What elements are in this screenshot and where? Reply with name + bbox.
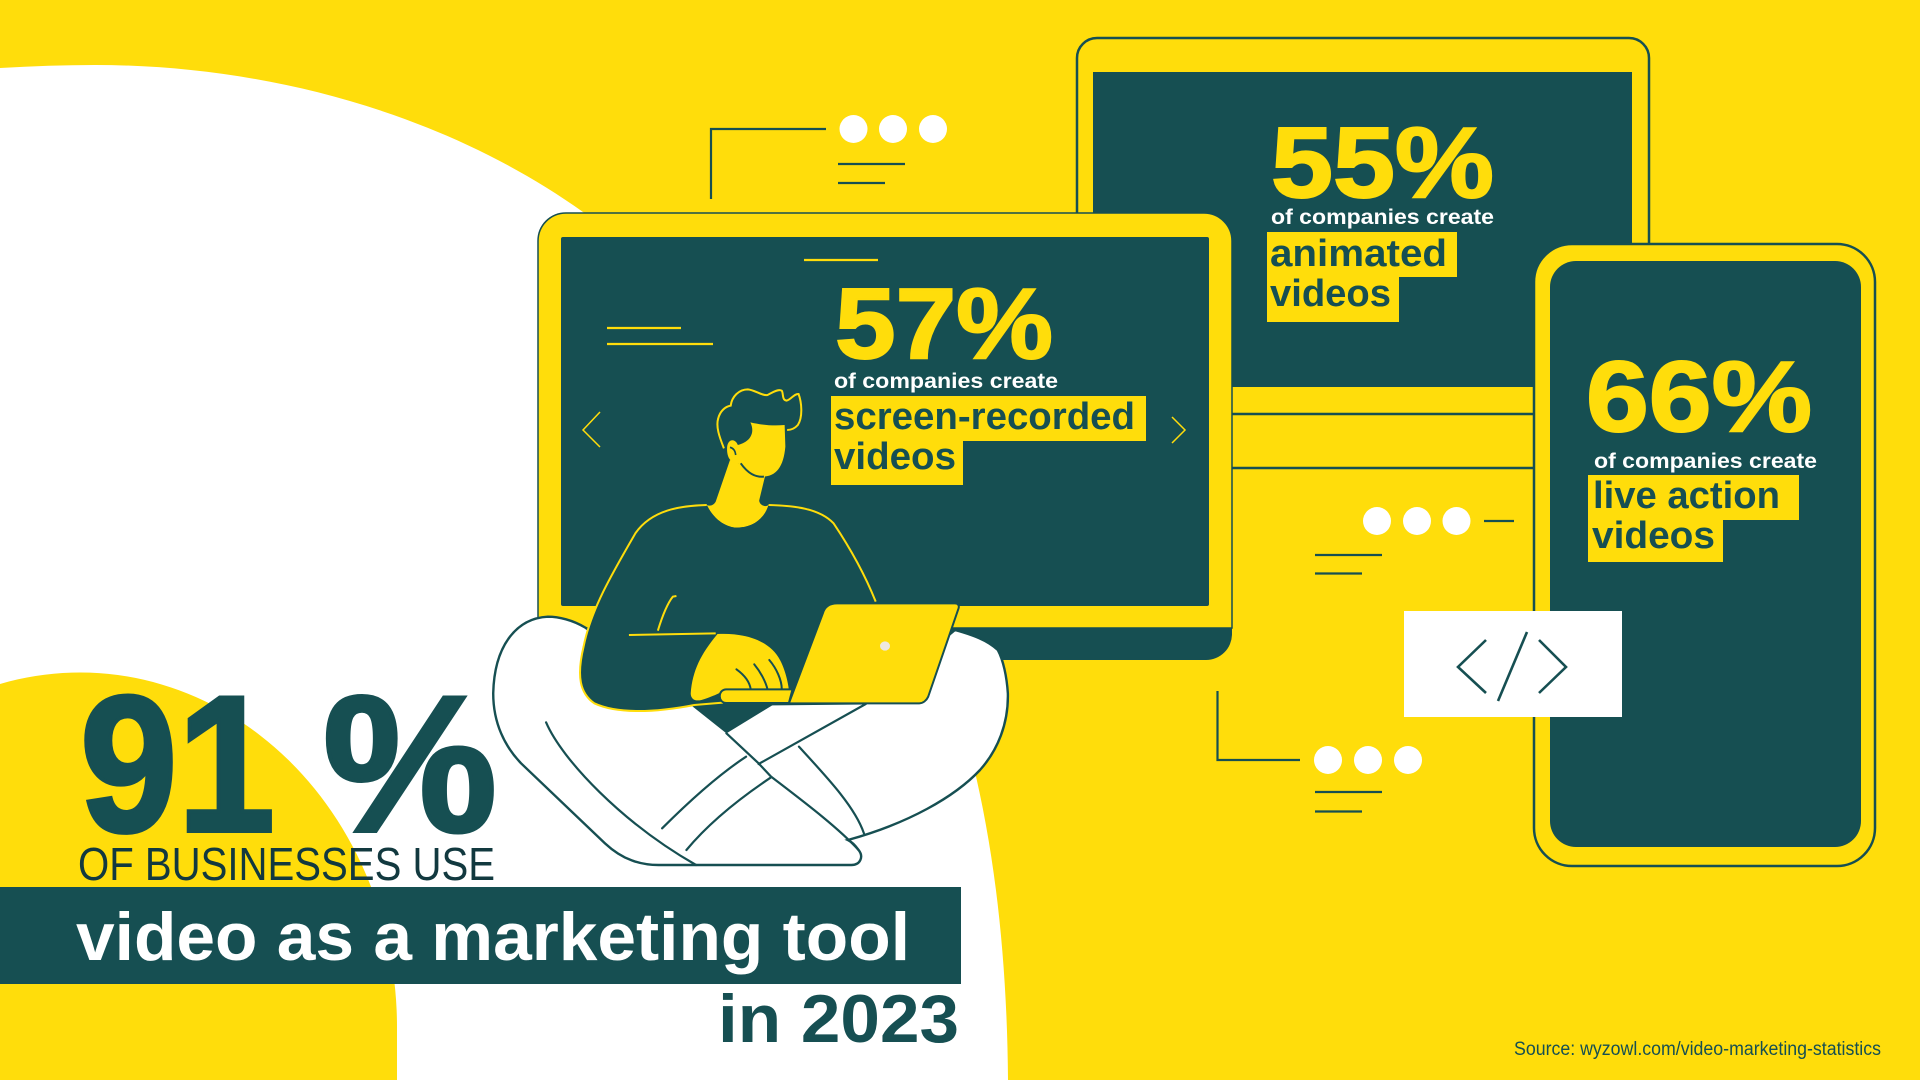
- highlight: screen-recorded videos: [831, 396, 1146, 485]
- icon: dots and lines bottom: [1218, 691, 1422, 812]
- icon: dots and lines top: [711, 115, 947, 199]
- heading: of businesses use: OF BUSINESSES USE: [78, 838, 495, 890]
- stat: 55%: 55%: [1271, 107, 1494, 219]
- icon: dots and lines middle: [1315, 507, 1514, 574]
- hand: [691, 634, 789, 700]
- banner: video as a marketing tool: video as a marketing tool: [76, 899, 910, 975]
- highlight: screen-recorded videos: videos: [834, 436, 956, 478]
- highlight: animated videos: animated: [1270, 233, 1447, 275]
- legs: [493, 617, 1008, 865]
- shirt: [580, 505, 876, 711]
- white background curve: [0, 65, 1008, 1080]
- icon: left arrow: [583, 412, 600, 447]
- highlight: screen-recorded videos: screen-recorded: [834, 396, 1135, 438]
- highlight: animated videos: videos: [1270, 273, 1391, 315]
- neck: [707, 460, 769, 528]
- panel: animated videos tablet: [1077, 38, 1649, 468]
- hair: [717, 389, 801, 460]
- heading: in 2023: in 2023: [718, 981, 959, 1057]
- stat: 57%: 57%: [835, 268, 1053, 380]
- panel: screen-recorded videos monitor: [538, 213, 1232, 660]
- source text: Source: wyzowl.com/video-marketing-statistics: [1514, 1039, 1881, 1060]
- yellow lower-left circle: [0, 673, 397, 1080]
- caption: of companies create (66%): of companies create: [1594, 450, 1817, 473]
- highlight: animated videos: [1267, 232, 1457, 322]
- laptop: [720, 603, 959, 703]
- icon: code tag box: [1404, 611, 1622, 717]
- caption: of companies create (57%): of companies create: [834, 370, 1058, 393]
- icon: right arrow: [1172, 417, 1185, 443]
- highlight: live action videos: [1588, 475, 1799, 562]
- banner: video as a marketing tool: [0, 887, 961, 984]
- illustration: person with laptop: [493, 389, 1008, 865]
- highlight: live action videos: videos: [1592, 515, 1715, 557]
- stat: 91%: 91: [80, 656, 275, 873]
- caption: of companies create (55%): of companies create: [1271, 206, 1494, 229]
- stat: 66%: 66%: [1586, 341, 1812, 453]
- stat: 91%: %: [323, 656, 497, 873]
- face: [727, 422, 785, 477]
- highlight: live action videos: live action: [1593, 475, 1780, 517]
- screen decoration lines: [607, 260, 878, 344]
- panel: live action videos phone: [1534, 244, 1875, 866]
